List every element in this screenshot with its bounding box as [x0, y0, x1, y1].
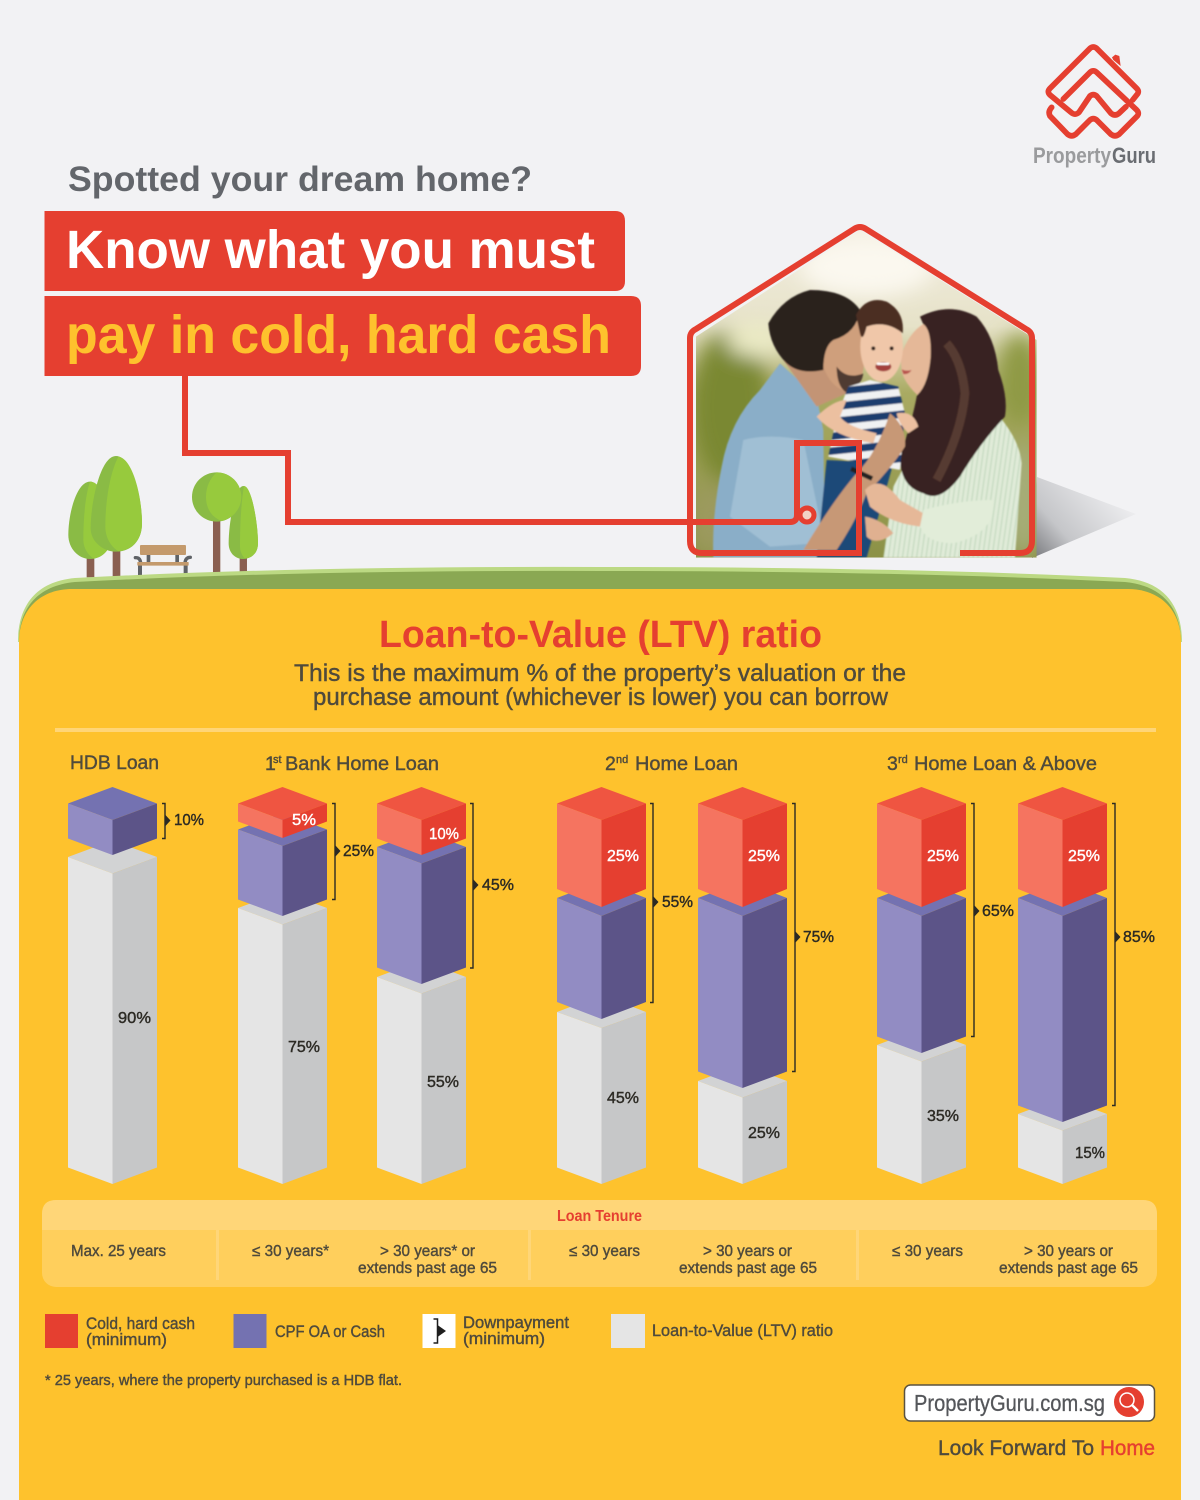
people [713, 290, 1022, 558]
search box: PropertyGuru.com.sg: PropertyGuru.com.sg [914, 1390, 1105, 1416]
tenure: 1st loan: ≤ 30 years* [252, 1243, 329, 1260]
woman's hair [900, 309, 1006, 496]
baby trousers [817, 460, 893, 558]
title banner line 1: Know what you must [66, 220, 595, 280]
bar: 2nd loan up to 30 years: 45% [607, 1090, 639, 1107]
bar: 3rd loan over 30 years: 25% [1068, 848, 1100, 865]
column heading: 3rd home loan and above: Home Loan & Above [914, 753, 1097, 775]
bar: 1st bank loan up to 30 years [238, 787, 374, 1184]
woman's face [901, 324, 931, 395]
tenure: 3rd loan: extends past age 65 [999, 1260, 1138, 1277]
man's arm [803, 413, 905, 550]
man's face [823, 317, 864, 392]
tenure: 1st loan [252, 1243, 497, 1277]
title banner line 1 [44, 211, 625, 291]
column heading: 2nd home loan: nd [616, 754, 628, 766]
tenure: 3rd loan: > 30 years or [1024, 1243, 1113, 1260]
tenure: 1st loan: > 30 years* or [380, 1243, 475, 1260]
icon: house logo [1048, 47, 1138, 136]
bar: 1st bank loan over 30 years: 55% [427, 1074, 459, 1091]
legend: LTV ratio [611, 1314, 833, 1348]
heading: spotted your dream home: Spotted your dream home? [68, 160, 532, 199]
bench [135, 545, 190, 575]
house shadow [1032, 477, 1136, 558]
bar: 2nd loan up to 30 years: 25% [607, 848, 639, 865]
man's hair [768, 290, 860, 371]
heading: LTV ratio: Loan-to-Value (LTV) ratio [379, 614, 822, 656]
column heading: 2nd home loan: 2 [605, 753, 616, 775]
tenure: 3rd loan: ≤ 30 years [892, 1243, 963, 1260]
legend: cold hard cash: Cold, hard cash [86, 1315, 195, 1333]
column heading: 3rd home loan and above: 3 [887, 753, 898, 775]
tree 3 [192, 472, 258, 573]
tenure: 2nd loan: > 30 years or [703, 1243, 792, 1260]
photo background foliage [690, 237, 1043, 560]
bar: 2nd loan up to 30 years [557, 787, 693, 1184]
tagline: Look Forward To [938, 1437, 1094, 1460]
column heading: 2nd home loan: Home Loan [635, 753, 738, 775]
baby face [860, 323, 904, 383]
panel: loan tenure: Loan Tenure [557, 1208, 642, 1225]
bar: 3rd loan up to 30 years: 25% [927, 848, 959, 865]
woman's body [883, 413, 1022, 558]
woman's sleeve [920, 500, 994, 543]
bar: 3rd loan over 30 years [1018, 787, 1155, 1184]
tenure: 1st loan: extends past age 65 [358, 1260, 497, 1277]
man's neck [784, 360, 847, 407]
connector end dot [800, 508, 814, 522]
bar: 3rd loan over 30 years: 85% [1123, 929, 1155, 946]
tree 2 [91, 456, 142, 576]
column heading: 1st bank home loan: Bank Home Loan [285, 753, 439, 775]
tagline: Home [1100, 1437, 1155, 1460]
baby arms [817, 400, 877, 443]
tenure: 3rd loan [892, 1243, 1138, 1277]
logo wordmark: Guru [1112, 143, 1156, 168]
family photo [690, 227, 1043, 560]
tree 1 [68, 482, 112, 577]
trees and bench [68, 456, 258, 577]
tenure: 2nd loan [569, 1243, 817, 1277]
legend: CPF OA or cash [234, 1314, 385, 1348]
baby shirt [828, 380, 905, 470]
legend [45, 1314, 833, 1349]
footnote: * 25 years, where the property purchased is a HDB flat. [45, 1373, 402, 1389]
legend: downpayment: Downpayment [463, 1314, 569, 1332]
logo: PropertyGuru [1033, 47, 1156, 168]
legend: cold hard cash: (minimum) [86, 1331, 167, 1349]
tenure: 2nd loan: extends past age 65 [679, 1260, 817, 1277]
column heading: HDB loan: HDB Loan [70, 752, 159, 774]
bar: HDB loan: 90% [118, 1010, 151, 1027]
LTV description: purchase amount (whichever is lower) you can borrow [313, 684, 889, 711]
connector line into house outline [185, 227, 1032, 553]
legend: cold hard cash [45, 1314, 195, 1349]
bar: HDB loan [68, 787, 204, 1184]
bar: 1st bank loan over 30 years: 10% [429, 826, 459, 843]
legend: downpayment: (minimum) [463, 1330, 545, 1348]
legend: CPF OA or cash: CPF OA or Cash [275, 1323, 385, 1341]
icon: magnifier [1114, 1387, 1144, 1417]
column heading: 1st bank home loan: 1 [265, 753, 276, 775]
woman's hands [865, 484, 923, 527]
logo wordmark: Property [1033, 143, 1112, 168]
ground hill [18, 567, 1182, 642]
bar: 1st bank loan up to 30 years: 75% [288, 1039, 320, 1056]
bar: 3rd loan up to 30 years: 35% [927, 1108, 959, 1125]
bar: 2nd loan over 30 years: 75% [803, 929, 834, 946]
bar: 2nd loan over 30 years: 25% [748, 848, 780, 865]
bar: 3rd loan up to 30 years: 65% [982, 903, 1014, 920]
bar: 2nd loan up to 30 years: 55% [662, 894, 693, 911]
bar: 2nd loan over 30 years [698, 787, 834, 1184]
column heading: 1st bank home loan: st [273, 754, 282, 766]
tenure: 2nd loan: ≤ 30 years [569, 1243, 640, 1260]
bar: 1st bank loan up to 30 years: 25% [343, 843, 374, 860]
LTV description: This is the maximum % of the property’s valuation or the [294, 660, 906, 687]
column heading: 3rd home loan and above: rd [898, 754, 908, 766]
tenure: HDB: Max. 25 years [71, 1243, 166, 1260]
bar: 1st bank loan up to 30 years: 5% [292, 812, 316, 829]
search box: PropertyGuru.com.sg [904, 1385, 1154, 1421]
legend: LTV ratio: Loan-to-Value (LTV) ratio [652, 1322, 833, 1340]
panel: LTV yellow [19, 589, 1181, 1500]
bar: 1st bank loan over 30 years [377, 787, 514, 1184]
bar: 1st bank loan over 30 years: 45% [482, 877, 514, 894]
bar: 2nd loan over 30 years: 25% [748, 1125, 780, 1142]
bar: HDB loan: 10% [174, 812, 204, 829]
panel: loan tenure [42, 1200, 1157, 1287]
bar: 3rd loan up to 30 years [877, 787, 1014, 1184]
LTV description [294, 660, 906, 711]
bar: 3rd loan over 30 years: 15% [1075, 1145, 1105, 1162]
title banner line 2: pay in cold, hard cash [66, 305, 611, 365]
man's shirt [713, 363, 825, 558]
legend: downpayment [422, 1314, 569, 1348]
